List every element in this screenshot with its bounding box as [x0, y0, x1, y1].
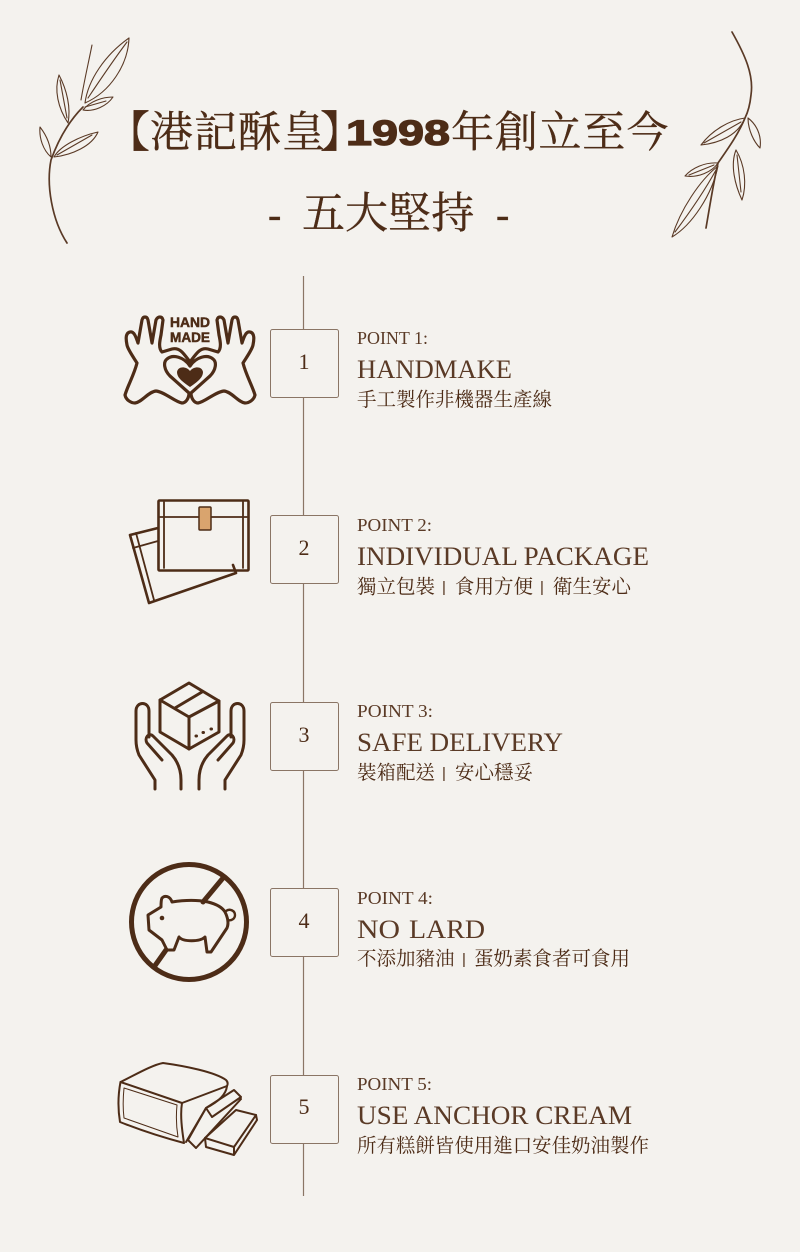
decoration: right leaf branch	[672, 32, 760, 237]
step 1: handmade	[125, 314, 552, 411]
text: point 4	[357, 888, 630, 970]
text: point 1: HANDMAKE	[357, 355, 512, 384]
icon: heart hands, hand made: MADE	[170, 329, 210, 345]
title: line one: 年創立至今	[451, 109, 669, 157]
text: point 5	[357, 1074, 649, 1157]
text: point 1	[357, 328, 552, 411]
number box 5	[270, 1076, 338, 1144]
text: point 2: 食用方便	[455, 576, 533, 598]
text: point 4: 不添加豬油	[357, 948, 455, 970]
timeline line	[302, 276, 304, 1196]
title: line one: 】	[320, 110, 363, 157]
number box 3: 3	[298, 722, 310, 747]
step 5: anchor cream	[119, 1063, 649, 1157]
text: point 1: 手工製作非機器生產線	[357, 389, 552, 411]
step 4: no lard	[132, 864, 630, 980]
text: point 2: 衛生安心	[553, 576, 633, 598]
title: line two: 五大堅持	[302, 191, 474, 238]
icon: butter block	[119, 1063, 257, 1155]
text: point 2: POINT 2:	[357, 515, 432, 535]
title: line two: -	[268, 192, 281, 237]
text: point 4: LARD	[409, 915, 485, 944]
title: line one: 港記酥皇	[150, 110, 325, 157]
text: point 4: |	[462, 951, 466, 968]
icon: no pig	[132, 864, 246, 980]
text: point 3: 安心穩妥	[455, 762, 533, 784]
text: point 5: 所有糕餅皆使用進口安佳奶油製作	[357, 1135, 649, 1157]
text: point 5: POINT 5:	[357, 1074, 432, 1094]
number box 3	[270, 702, 338, 770]
step 3: safe delivery	[136, 683, 563, 789]
text: point 1: POINT 1:	[357, 328, 428, 348]
decoration: left leaf branch	[40, 38, 129, 243]
number box 1: 1	[298, 349, 310, 374]
text: point 3	[357, 701, 563, 784]
text: point 5: USE ANCHOR CREAM	[357, 1101, 632, 1130]
text: point 2: INDIVIDUAL PACKAGE	[357, 542, 649, 571]
icon: package envelopes	[130, 500, 248, 603]
text: point 2: |	[540, 579, 544, 596]
number box 2: 2	[298, 535, 310, 560]
number box 2	[270, 516, 338, 584]
text: point 4: POINT 4:	[357, 888, 433, 908]
title: line one	[107, 109, 669, 157]
text: point 3: |	[442, 765, 446, 782]
text: point 3: 裝箱配送	[357, 762, 435, 784]
text: point 3: SAFE DELIVERY	[357, 728, 563, 757]
step 2: individual package	[130, 500, 649, 603]
number box 5: 5	[298, 1094, 310, 1119]
number box 1	[270, 330, 338, 398]
icon: heart hands, hand made: HAND	[170, 314, 210, 330]
text: point 2	[357, 515, 649, 598]
text: point 3: POINT 3:	[357, 701, 433, 721]
text: point 2: |	[442, 579, 446, 596]
number box 4	[270, 888, 338, 956]
text: point 2: 獨立包裝	[357, 576, 435, 598]
text: point 4: 蛋奶素食者可食用	[474, 948, 630, 970]
icon: heart hands, hand made	[125, 314, 255, 403]
number box 4: 4	[298, 908, 310, 933]
title: line one: 【	[107, 110, 150, 157]
icon: hands holding box	[136, 683, 244, 789]
title: line two: -	[496, 192, 509, 237]
title: line one: 1998	[346, 114, 450, 153]
text: point 4: NO	[357, 915, 400, 944]
